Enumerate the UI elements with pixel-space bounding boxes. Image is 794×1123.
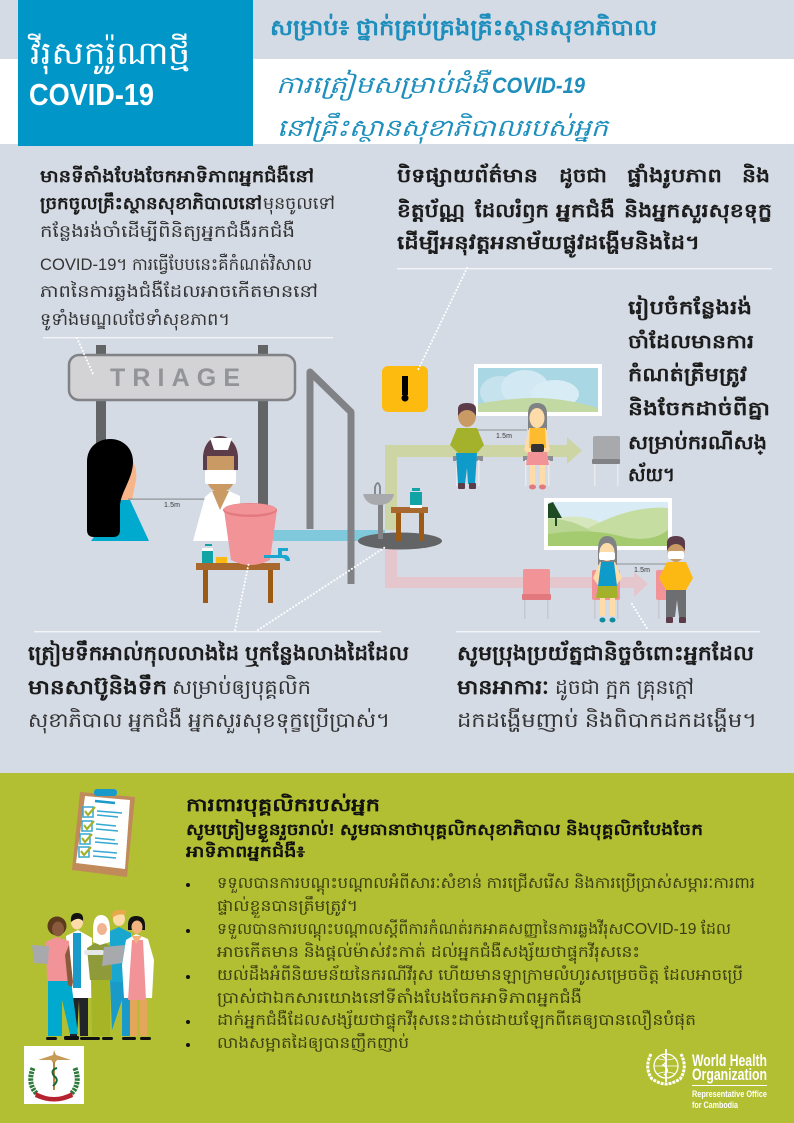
staff: orange-haired nurse <box>110 910 131 1036</box>
person: waiting woman <box>523 403 553 490</box>
bullet list: លាងសម្អាតដៃឲ្យបានញឹកញាប់ <box>217 1032 409 1052</box>
person: waiting man <box>450 403 484 489</box>
main heading: COVID-19 <box>492 73 586 98</box>
1.5m distance in green route: 1.5m <box>496 433 512 440</box>
1.5m distance in pink route <box>616 564 666 574</box>
text block: alcohol hand rub: ត្រៀមទឹកអាល់កុលលាងដៃ ឬកន្លែងលាងដៃដែល <box>28 640 409 667</box>
empty pink chair <box>522 569 551 619</box>
1.5m distance at triage <box>128 498 210 509</box>
logo: World Health Organization: Representative Office <box>692 1089 767 1099</box>
text block: alcohol hand rub: មានសាប៊ូនិងទឹក <box>28 674 167 701</box>
person: patient at triage <box>87 439 149 541</box>
text block: alcohol hand rub: សុខាភិបាល អ្នកជំងឺ អ្នកសួរសុខទុក្ខប្រើប្រាស់។ <box>28 707 390 734</box>
audience heading: សម្រាប់៖ ថ្នាក់គ្រប់គ្រងគ្រឹះស្ថានសុខាភិបាល <box>270 13 657 43</box>
text block: posters and leaflets: ដូចជា <box>559 166 607 189</box>
icon: clipboard checklist <box>72 789 135 877</box>
text block: posters and leaflets: ដែលរំឭក <box>474 198 549 224</box>
main heading: នៅគ្រឹះស្ថានសុខាភិបាលរបស់អ្នក <box>277 112 610 144</box>
text block: triage station: មានទីតាំងបែងចែកអាទិភាពអ្នកជំងឺនៅ <box>40 165 314 187</box>
text block: posters and leaflets: ផ្ទាំងរូបភាព <box>627 163 722 189</box>
person: masked man <box>656 536 693 623</box>
text block: symptoms: សូមប្រុងប្រយ័ត្នជានិច្ចចំពោះអ្នកដែល <box>457 640 754 667</box>
text block: posters and leaflets: ដើម្បីអនុវត្តអនាម័យផ្លូវដង្ហើមនិងដៃ។ <box>397 230 700 258</box>
text block: waiting area: ចាំដែលមានការ <box>628 329 754 353</box>
text block: waiting area: កំណត់ត្រឹមត្រូវ <box>628 362 747 388</box>
text block: triage station: ច្រកចូលគ្រឹះស្ថានសុខាភិបាលនៅ <box>40 192 262 215</box>
panel: protect your staff <box>0 773 794 1123</box>
empty gray chair <box>592 436 620 486</box>
bullet list <box>186 873 755 1052</box>
text block: triage station: COVID-19។ ការធ្វើបែបនេះគឺកំណត់វិសាល <box>40 253 312 275</box>
logo: ministry of health <box>24 1046 84 1104</box>
text block: triage station: កន្លែងរង់ចាំដើម្បីពិនិត្យអ្នកជំងឺរកជំងឺ <box>40 220 295 242</box>
arrow: pink route <box>385 548 648 597</box>
text block: symptoms: ដូចជា ក្អក គ្រុនក្តៅ <box>555 677 694 701</box>
main heading: ការត្រៀមសម្រាប់ជំងឺ <box>276 69 493 101</box>
1.5m distance at triage: 1.5m <box>164 502 180 509</box>
staff: woman in white coat <box>122 916 154 1036</box>
text block: waiting area: រៀបចំកន្លែងរង់ <box>628 295 752 321</box>
text block: symptoms <box>457 640 757 732</box>
text block: posters and leaflets: ខិត្តប័ណ្ណ <box>397 198 465 222</box>
intro text <box>186 819 703 862</box>
logo: World Health Organization: World Health <box>692 1051 767 1070</box>
text block: waiting area: សម្រាប់ករណីសង្ <box>628 430 767 455</box>
heading: protect your staff: ការពារបុគ្គលិករបស់អ្នក <box>186 793 380 818</box>
bullet list: ដាក់អ្នកជំងឺដែលសង្ស័យថាផ្ទុកវីរុសនេះដាច់ដោយឡែកពីគេឲ្យបានលឿនបំផុត <box>217 1009 696 1032</box>
bullet list: អាចកើតមាន និងផ្តល់ម៉ាស់វះកាត់ ដល់អ្នកជំងឺសង្ស័យថាផ្ទុកវីរុសនេះ <box>217 941 640 964</box>
intro text: សូមត្រៀមខ្លួនរួចរាល់! សូមធានាថាបុគ្គលិកសុខាភិបាល និងបុគ្គលិកបែងចែក <box>186 819 703 843</box>
door frame <box>310 372 351 584</box>
person: masked woman <box>592 536 622 622</box>
text block: posters and leaflets: បិទផ្សាយព័ត៌មាន <box>397 163 538 187</box>
icon: healthcare staff group <box>32 910 154 1040</box>
logo: World Health Organization <box>648 1049 767 1110</box>
text block: posters and leaflets: និងអ្នកសួរសុខទុក្ខ <box>624 198 772 224</box>
wall picture: sky <box>474 364 602 416</box>
text block: posters and leaflets <box>397 163 772 258</box>
text block: triage station: មុនចូលទៅ <box>263 194 335 215</box>
text block: waiting area <box>628 295 770 486</box>
text block: posters and leaflets: អ្នកជំងឺ <box>556 198 615 222</box>
bullet list: ប្រាស់ជាឯកសារយោងនៅទីតាំងបែងចែកអាទិភាពអ្នកជំងឺ <box>217 987 582 1007</box>
logo: World Health Organization: Organization <box>692 1065 767 1084</box>
bullet list: ទទួលបានការបណ្តុះបណ្តាលអំពីសារៈសំខាន់ ការជ្រើសរើស និងការប្រើប្រាស់សម្ភារៈការពារ <box>217 873 755 895</box>
main heading <box>276 69 610 144</box>
1.5m distance in pink route: 1.5m <box>634 567 650 574</box>
triage sign <box>69 345 295 505</box>
arrow: green route <box>385 437 582 530</box>
text block: triage station: ភាពនៃការឆ្លងជំងឺដែលអាចកើតមាននៅ <box>40 280 318 301</box>
wall picture: hills <box>544 498 672 550</box>
text block: posters and leaflets: និង <box>742 163 770 187</box>
staff: man in white coat <box>66 913 92 1036</box>
title block <box>18 0 253 146</box>
1.5m distance in green route <box>477 430 527 440</box>
staff: woman in hijab <box>84 915 125 1036</box>
text block: triage station <box>40 165 335 331</box>
text block: symptoms: ដកដង្ហើមញាប់ និងពិបាកដកដង្ហើម។ <box>457 707 757 732</box>
text block: waiting area: ស័យ។ <box>628 462 675 486</box>
warning icon <box>382 366 428 412</box>
intro text: អាទិភាពអ្នកជំងឺ៖ <box>186 841 305 862</box>
text block: alcohol hand rub <box>28 640 409 734</box>
logo: World Health Organization: for Cambodia <box>692 1100 739 1110</box>
staff: shoes <box>46 1036 151 1040</box>
triage sign: TRIAGE <box>110 364 240 392</box>
text block: alcohol hand rub: សម្រាប់ឲ្យបុគ្គលិក <box>172 674 311 701</box>
staff: nurse in pink <box>32 916 78 1036</box>
text block: symptoms: មានអាការៈ <box>457 677 549 699</box>
sink and sanitizer <box>358 483 442 550</box>
bullet list: ផ្ទាល់ខ្លួនបានត្រឹមត្រូវ។ <box>217 895 358 918</box>
text block: triage station: ទូទាំងមណ្ឌលថែទាំសុខភាព។ <box>40 308 230 331</box>
floor band <box>273 530 385 541</box>
title block: វីរុសកូរ៉ូណាថ្មី <box>27 33 190 75</box>
handwash table with bucket <box>196 503 290 603</box>
person: nurse <box>193 436 240 541</box>
bullet list: ទទួលបានការបណ្តុះបណ្តាលស្តីពីការកំណត់រកអាគសញ្ញានៃការឆ្លងវីរុសCOVID-19 ដែល <box>217 919 731 941</box>
text block: waiting area: និងចែកដាច់ពីគ្នា <box>628 396 770 420</box>
title block: COVID-19 <box>29 77 154 112</box>
dotted leader lines <box>77 268 648 630</box>
bullet list: យល់ដឹងអំពីនិយមន័យនៃករណីវីរុស ហើយមានឡាក្រាមលំហូរសម្រេចចិត្ត ដែលអាចប្រើ <box>217 964 743 985</box>
